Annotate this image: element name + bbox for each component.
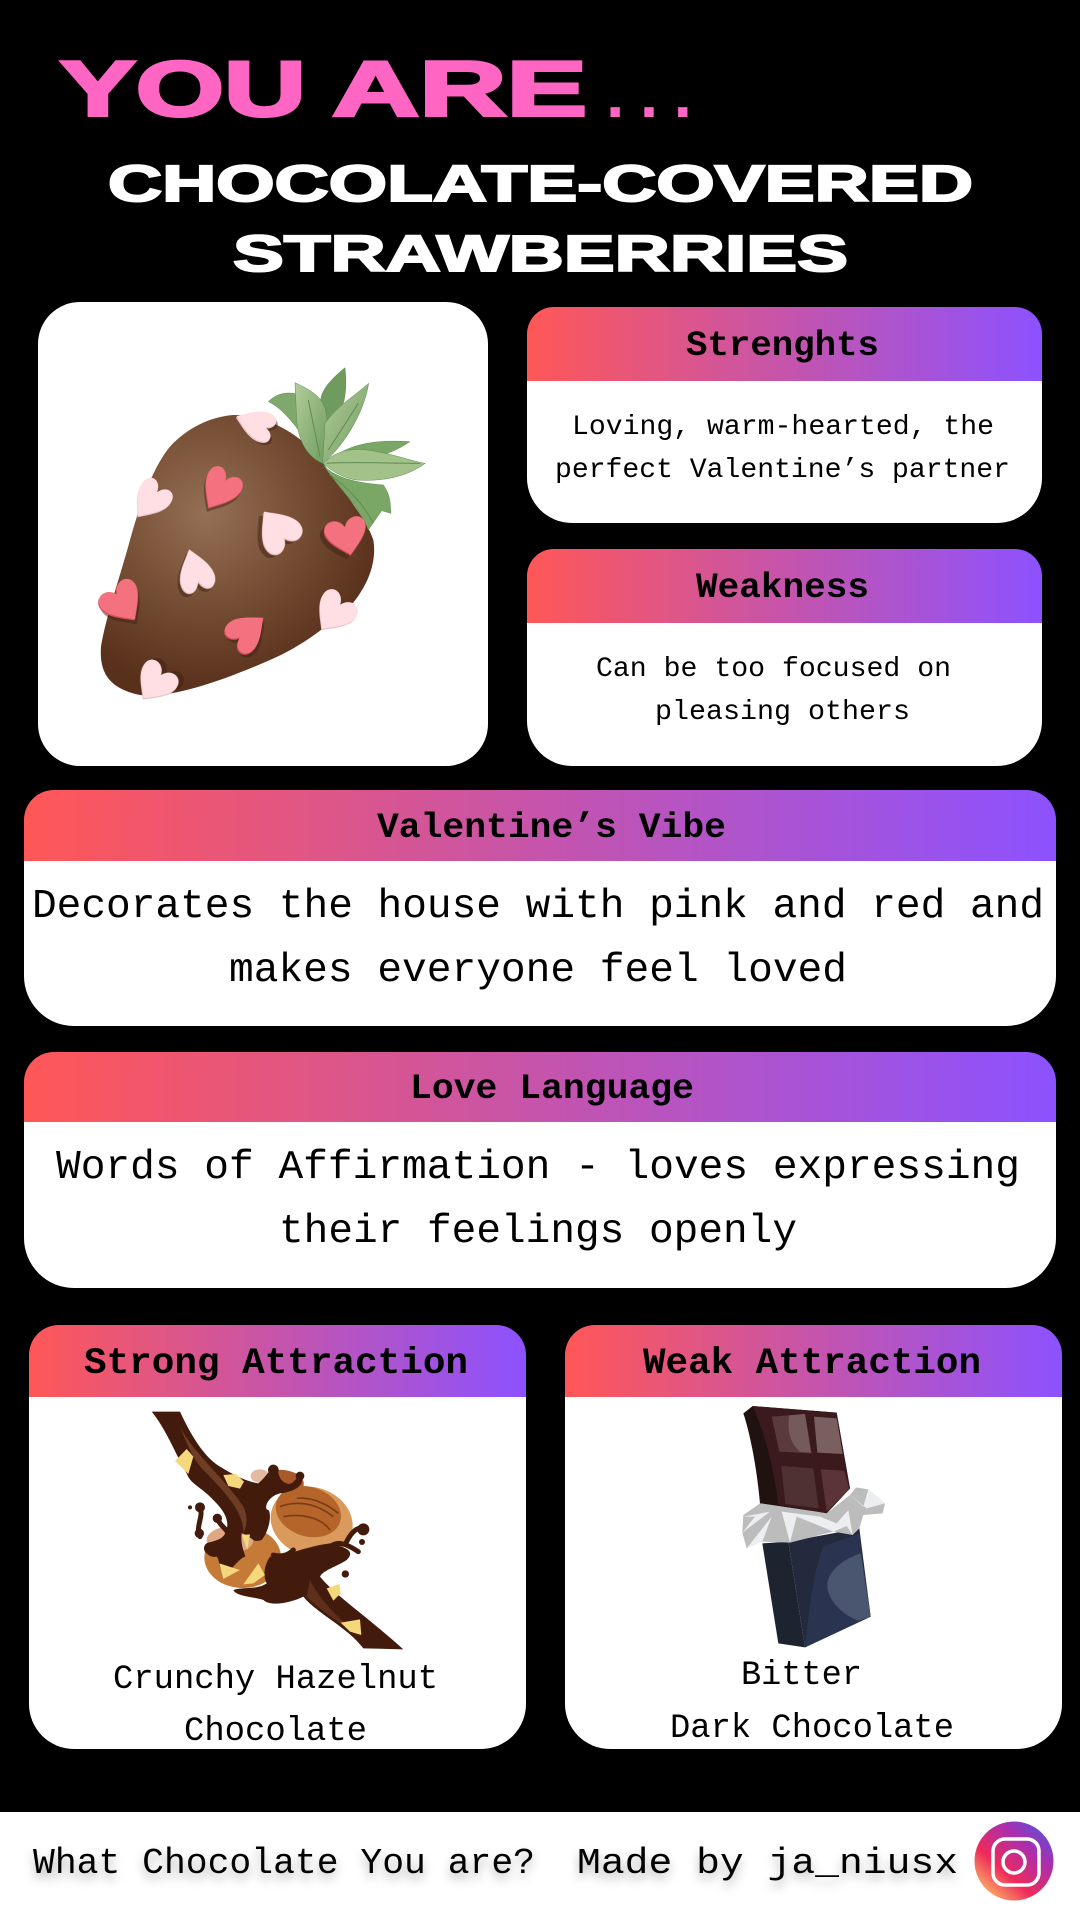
caption: bitter dark chocolate: [670, 1657, 954, 1748]
panel: love language: [24, 1052, 1056, 1288]
text: weakness description: Can be too focused on: [596, 654, 951, 685]
caption: bitter dark chocolate: Dark Chocolate: [670, 1710, 954, 1748]
panel: strengths: [527, 307, 1042, 523]
caption: bitter dark chocolate: Bitter: [741, 1657, 862, 1695]
heading: valentine's vibe: Valentine’s Vibe: [377, 808, 726, 848]
text: valentine's vibe description: makes everyone feel loved: [229, 948, 847, 994]
heading: you are: ARE: [332, 44, 587, 132]
heading: chocolate-covered strawberries: CHOCOLATE-COVERED: [108, 155, 973, 212]
heading: weak attraction: Weak Attraction: [643, 1343, 981, 1385]
text: footer credits: Made by ja_niusx: [577, 1843, 958, 1884]
panel: strong attraction: [29, 1325, 526, 1751]
caption: crunchy hazelnut chocolate: Crunchy Hazelnut: [113, 1661, 438, 1699]
text: strengths description: perfect Valentine’s partner: [555, 455, 1010, 486]
leaves: [268, 368, 425, 530]
caption: crunchy hazelnut chocolate: [113, 1661, 438, 1751]
icon: instagram: [974, 1822, 1054, 1900]
heading: you are: [60, 44, 692, 132]
title: [60, 44, 973, 282]
illustration: crunchy hazelnut chocolate: [152, 1412, 403, 1649]
text: love language description: Words of Affirmation - loves expressing: [56, 1145, 1020, 1191]
heart sprinkles: [94, 402, 371, 712]
heading: chocolate-covered strawberries: [108, 155, 973, 282]
illustration: dark chocolate bar: [742, 1406, 885, 1647]
panel: strawberry illustration: [38, 302, 488, 766]
heading: strenghts: Strenghts: [686, 326, 879, 366]
heading: strong attraction: Strong Attraction: [84, 1343, 468, 1385]
text: strengths description: Loving, warm-hearted, the: [572, 412, 994, 443]
heading: weakness: Weakness: [696, 568, 869, 608]
panel: weak attraction: [565, 1325, 1062, 1749]
footer bar: [0, 1812, 1080, 1920]
text: strengths description: [555, 412, 1010, 486]
text: valentine's vibe description: [32, 884, 1044, 994]
illustration: chocolate-covered strawberry: [94, 368, 425, 712]
heading: you are: ...: [606, 57, 692, 131]
panel: valentine's vibe: [24, 790, 1056, 1026]
caption: crunchy hazelnut chocolate: Chocolate: [184, 1713, 367, 1751]
text: love language description: their feelings openly: [279, 1209, 797, 1255]
heading: love language: Love Language: [410, 1069, 694, 1109]
heading: you are: YOU: [60, 44, 306, 132]
text: valentine's vibe description: Decorates the house with pink and red and: [32, 884, 1044, 930]
text: footer credits: What Chocolate You are?: [33, 1843, 535, 1884]
text: love language description: [56, 1145, 1020, 1255]
heading: chocolate-covered strawberries: STRAWBERRIES: [233, 225, 848, 282]
berry body: [101, 415, 374, 695]
text: weakness description: pleasing others: [655, 697, 910, 728]
panel: weakness: [527, 549, 1042, 766]
text: footer credits: [33, 1843, 958, 1884]
text: weakness description: [596, 654, 951, 728]
